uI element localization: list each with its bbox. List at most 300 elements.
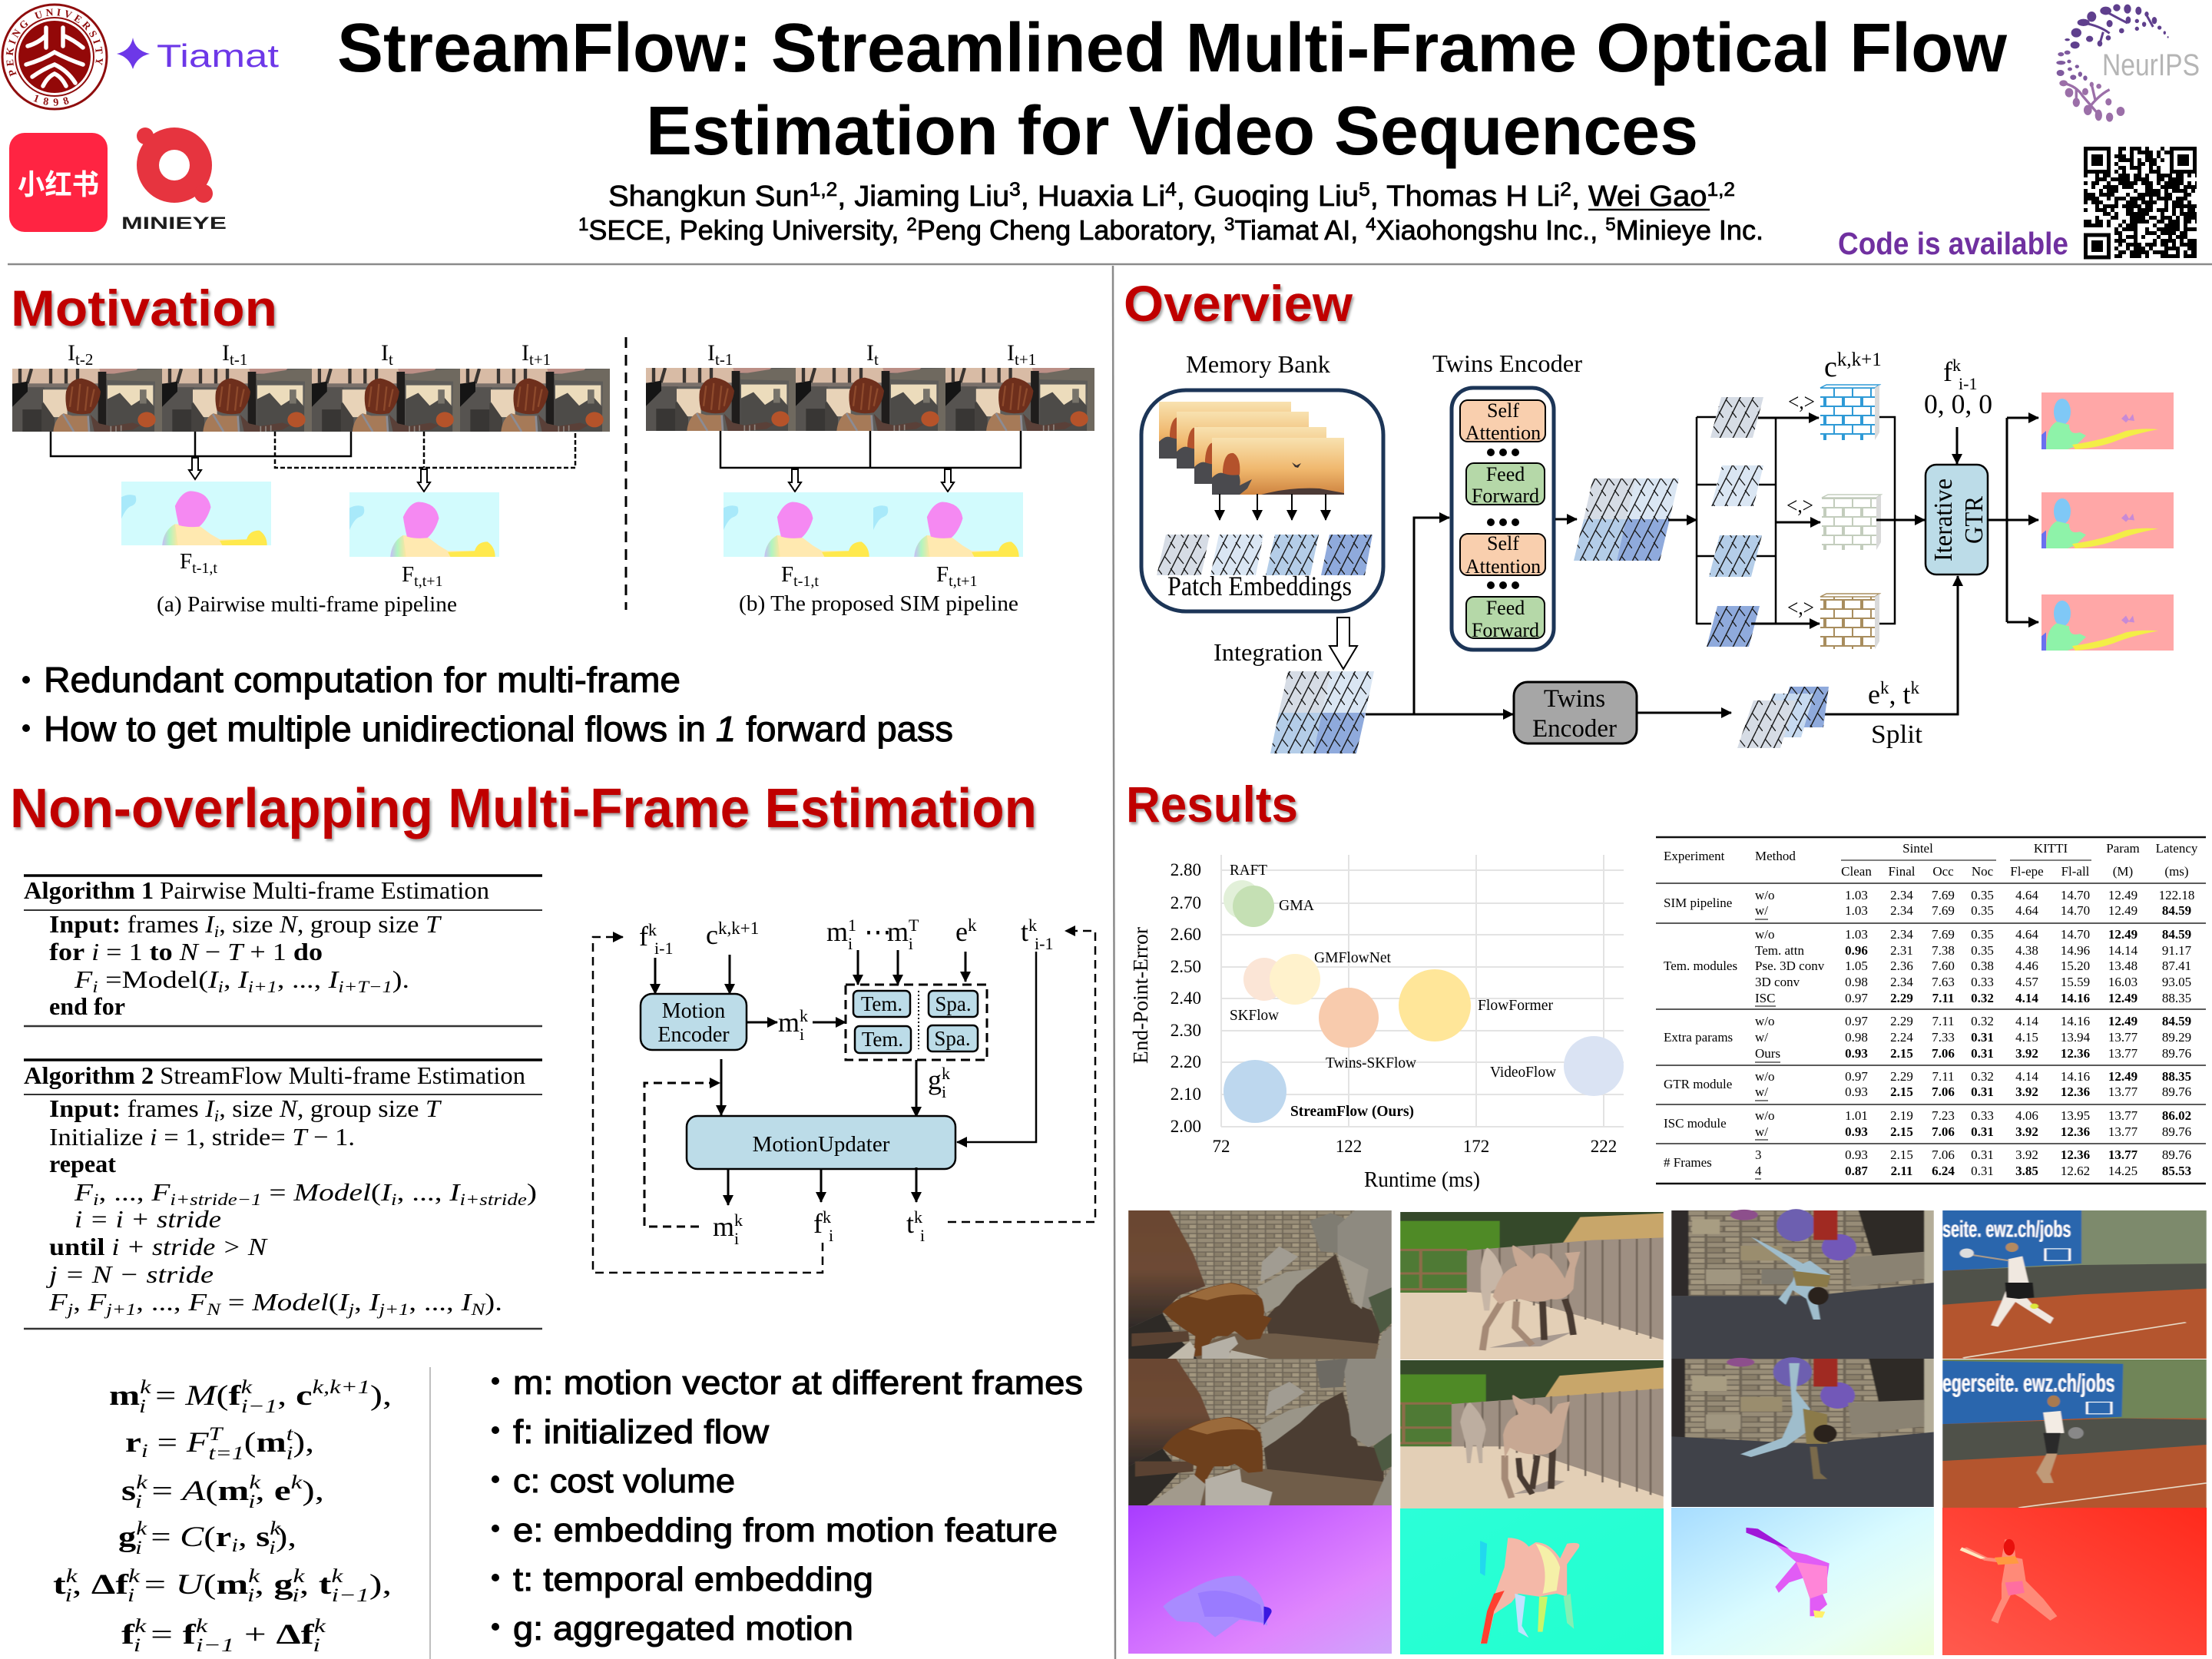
algorithm 2: [24, 1060, 542, 1329]
table header: Fl-all: [2061, 864, 2090, 879]
table values: 2.29: [1890, 1069, 1913, 1084]
diagram: motion updater architecture: [593, 916, 1095, 1273]
algorithm 2: i: [391, 1190, 397, 1209]
y axis ticks: 2.10: [1171, 1084, 1201, 1104]
y axis ticks: 2.80: [1171, 860, 1201, 879]
input labels: T: [909, 916, 919, 935]
equations: (: [244, 1427, 256, 1459]
inner product labels: <,>: [1788, 390, 1815, 413]
algorithm 2: i: [214, 1106, 219, 1125]
method names: w/: [1755, 1084, 1768, 1099]
equations: i: [269, 1538, 276, 1558]
table values: 12.36: [2061, 1046, 2090, 1061]
table values: 1.01: [1845, 1108, 1868, 1123]
arrow: [720, 1059, 722, 1115]
equations: i−1: [196, 1635, 234, 1656]
box: Iterative GTR: [1926, 465, 1988, 575]
QR code: [2084, 149, 2197, 257]
table header: Sintel: [1902, 841, 1933, 856]
symbol legend: t: temporal embedding: [513, 1561, 873, 1598]
equations: =: [148, 1427, 187, 1459]
arrow: [418, 469, 430, 492]
table values: 0.31: [1971, 1124, 1994, 1139]
bubble labels: FlowFormer: [1478, 997, 1553, 1014]
algorithm 2: Model (I: [252, 1288, 346, 1316]
frame labels: t-1: [715, 350, 733, 369]
equations: ,: [238, 1522, 256, 1553]
equations: k,k+1: [313, 1377, 370, 1398]
table values: 2.34: [1890, 975, 1913, 989]
label e,t: k: [1911, 678, 1920, 697]
table values: 16.03: [2108, 975, 2137, 989]
table values: 4.14: [2015, 991, 2038, 1005]
photo: camel flow: [1400, 1508, 1664, 1654]
frame labels: t+1: [529, 350, 551, 369]
output arrows: [728, 1167, 916, 1205]
equations: k: [293, 1566, 306, 1587]
flow labels: [781, 562, 978, 590]
table values: 7.69: [1932, 888, 1955, 902]
logo: Xiaohongshu: [9, 133, 108, 232]
table values: 7.69: [1932, 927, 1955, 942]
equations: k: [270, 1518, 281, 1539]
affiliations: Peng Cheng Laboratory,: [917, 214, 1224, 246]
algorithm 2: , ...,: [99, 1178, 151, 1206]
y axis ticks: 2.50: [1171, 957, 1201, 976]
table values: 12.36: [2061, 1147, 2090, 1162]
table values: 3.92: [2015, 1046, 2038, 1061]
frame labels: I: [1007, 340, 1015, 366]
twins encoder panel: Feed: [1486, 463, 1525, 485]
bubble labels: RAFT: [1230, 862, 1267, 879]
table values: 12.36: [2061, 1084, 2090, 1099]
table values: 3.92: [2015, 1124, 2038, 1139]
label: Memory Bank: Memory Bank: [1186, 350, 1330, 378]
input arrows: [655, 950, 965, 994]
frame labels: t: [874, 350, 879, 369]
table values: 0.31: [1971, 1046, 1994, 1061]
table values: 13.48: [2108, 959, 2137, 973]
connector: [1414, 518, 1449, 714]
equations: =: [142, 1522, 180, 1553]
algorithm 1: i: [92, 977, 98, 996]
frame labels: [707, 340, 1036, 369]
equations: i: [247, 1585, 254, 1606]
table values: 2.19: [1890, 1108, 1913, 1123]
table values: 4.14: [2015, 1069, 2038, 1084]
photo: dancer frame 2: [1671, 1357, 1934, 1507]
authors: , Jiaming Liu: [837, 180, 1009, 213]
equations: e: [274, 1475, 291, 1507]
output labels: m: [713, 1211, 734, 1242]
algorithm 2: i: [93, 1190, 99, 1209]
output arrows: [1988, 418, 2038, 622]
table values: 13.94: [2061, 1030, 2091, 1045]
label c: k,k+1: [1837, 349, 1882, 370]
table values: 7.60: [1932, 959, 1955, 973]
algorithm 1: i+T−1: [338, 977, 392, 996]
table values: 7.63: [1932, 975, 1955, 989]
twins encoder panel: Attention: [1465, 422, 1541, 444]
cost volume: blue: [1820, 385, 1879, 440]
equations: =: [141, 1619, 183, 1651]
table values: 0.98: [1845, 975, 1868, 989]
equations: c: [296, 1380, 313, 1412]
algorithm 2: F: [151, 1178, 171, 1206]
algorithm 1: ,: [224, 965, 238, 993]
algorithm 1: i: [214, 922, 219, 941]
table values: 14.14: [2108, 943, 2138, 958]
equations: T: [209, 1424, 224, 1445]
logo: Minieye: [121, 127, 227, 233]
code link note: Code is available: [1838, 226, 2068, 261]
diagram: StreamFlow overview: [1141, 349, 2174, 753]
table header: Latency: [2156, 841, 2198, 856]
flow labels: t-1,t: [192, 560, 217, 577]
table values: 89.76: [2162, 1124, 2191, 1139]
dashed feedback: m: [644, 1083, 720, 1227]
table values: 4.57: [2015, 975, 2038, 989]
flow map: [873, 492, 1023, 557]
table values: 13.77: [2108, 1147, 2138, 1162]
photo: tennis frame 1: [1942, 1210, 2207, 1359]
flow labels: F: [180, 549, 192, 574]
algorithm 2: i+stride−1: [170, 1190, 262, 1209]
input labels: 1: [848, 916, 856, 935]
table header: Occ: [1932, 864, 1954, 879]
inner product labels: <,>: [1787, 596, 1814, 619]
flow labels: t,t+1: [414, 573, 443, 590]
table values: 13.77: [2108, 1046, 2138, 1061]
table values: 2.15: [1890, 1124, 1913, 1139]
logo: Peking University seal: [2, 3, 108, 111]
input labels: e: [955, 916, 968, 947]
photo: dancer frame 1: [1671, 1209, 1934, 1359]
equations: ,: [277, 1380, 296, 1412]
table values: 0.96: [1845, 943, 1868, 958]
split buses: [1697, 417, 1776, 624]
label f: i-1: [1959, 374, 1977, 393]
frame strip: [12, 369, 610, 432]
algorithm 1: I: [327, 965, 339, 993]
algorithm 2: i+stride: [460, 1190, 527, 1209]
connector: [1366, 713, 1513, 716]
input labels: k: [1028, 916, 1037, 935]
merge bus: [1879, 417, 1895, 624]
method names: Ours: [1755, 1046, 1780, 1061]
equations: +: [234, 1619, 276, 1651]
table values: 14.96: [2061, 943, 2090, 958]
frame labels: t+1: [1015, 350, 1036, 369]
x axis ticks: 172: [1463, 1137, 1489, 1156]
authors: 4: [1165, 179, 1177, 200]
equations: i: [134, 1635, 141, 1656]
table values: 1.03: [1845, 927, 1868, 942]
arrow: [916, 1060, 917, 1117]
table values: 13.95: [2061, 1108, 2090, 1123]
algorithm 2: N: [470, 1300, 486, 1319]
authors: , Guoqing Liu: [1177, 180, 1359, 213]
flow output 1: [2041, 392, 2174, 449]
algorithm 2: ).: [485, 1288, 502, 1316]
table values: 14.16: [2061, 1069, 2090, 1084]
dashed group: temporal and spatial: Tem.: [862, 1028, 903, 1051]
equations: s: [256, 1522, 270, 1553]
experiment names: SIM pipeline: [1664, 896, 1732, 910]
algorithm 2: , ...,: [136, 1288, 188, 1316]
table values: 0.33: [1971, 975, 1994, 989]
equations: g: [273, 1569, 293, 1601]
algorithm 1: F: [74, 965, 93, 993]
table values: 0.97: [1845, 991, 1868, 1005]
table values: 0.31: [1971, 1030, 1994, 1045]
connectors: [720, 431, 1021, 468]
affiliations: 4: [1366, 214, 1376, 235]
table values: 89.76: [2162, 1147, 2191, 1162]
table values: 14.16: [2061, 1014, 2090, 1028]
bubble labels: StreamFlow (Ours): [1290, 1103, 1414, 1120]
input labels: t: [1021, 916, 1028, 947]
equations: Δf: [91, 1569, 129, 1601]
equations: k: [241, 1377, 253, 1398]
equations: k: [249, 1472, 261, 1493]
logo: Tiamat: Tiamat: [157, 38, 279, 74]
twins encoder panel: Self: [1487, 532, 1519, 555]
y axis ticks: 2.70: [1171, 893, 1201, 912]
algorithm 2: =: [220, 1288, 252, 1316]
photo: bear frame 2: [1128, 1359, 1392, 1505]
table values: 2.34: [1890, 927, 1913, 942]
method names: w/: [1755, 1124, 1768, 1139]
algorithm 1: ).: [392, 965, 409, 993]
solid connectors: [51, 432, 351, 456]
equations: f: [121, 1619, 135, 1651]
y axis ticks: [1171, 860, 1201, 1136]
flow labels: F: [781, 562, 793, 587]
algorithm 1: , size: [219, 910, 280, 938]
equations: t=1: [209, 1443, 244, 1464]
symbol legend: e: embedding from motion feature: [513, 1512, 1058, 1549]
equations: i: [248, 1492, 255, 1512]
symbol legend: g: aggregated motion: [513, 1610, 853, 1647]
algorithm 2: , size: [219, 1094, 280, 1122]
algorithm 2: Input: frames I: [49, 1094, 214, 1122]
equations: i: [141, 1441, 148, 1462]
method names: 3: [1755, 1147, 1762, 1162]
table values: 0.32: [1971, 1014, 1994, 1028]
algorithm 2: , ...,: [409, 1288, 462, 1316]
method names: w/o: [1755, 888, 1774, 902]
photo: bear frame 1: [1128, 1210, 1392, 1359]
authors: , Huaxia Li: [1021, 180, 1165, 213]
algorithm 1: Algorithm 1 Pairwise Multi-frame Estimation: [24, 876, 489, 904]
photo: camel frame 2: [1400, 1360, 1664, 1508]
algorithm 2: N, group size T: [280, 1094, 439, 1122]
box: Motion Encoder: Motion: [662, 999, 725, 1023]
correlation arrows: [1751, 418, 1820, 624]
method names: w/o: [1755, 927, 1774, 942]
algorithm 1: [24, 876, 542, 1026]
table values: 0.98: [1845, 1030, 1868, 1045]
box: Twins Encoder: Encoder: [1532, 715, 1617, 743]
table header: Noc: [1972, 864, 1994, 879]
output labels: k: [823, 1207, 831, 1227]
logo: Xiaohongshu: 小红书: [18, 169, 99, 200]
equations: i: [139, 1396, 146, 1417]
algorithm 1: I: [237, 965, 249, 993]
table values: 13.77: [2108, 1030, 2138, 1045]
equations: t: [53, 1569, 67, 1601]
equations: ,: [254, 1569, 273, 1601]
heading: Results: Results: [1126, 776, 1298, 833]
bubble labels: VideoFlow: [1490, 1064, 1557, 1081]
table values: 88.35: [2162, 991, 2191, 1005]
authors: Shangkun Sun: [608, 180, 800, 213]
authors: 2: [1560, 179, 1571, 200]
table values: 3.92: [2015, 1147, 2038, 1162]
table values: 0.97: [1845, 1069, 1868, 1084]
arrow: [813, 1022, 846, 1023]
algorithm 1: end for: [49, 992, 125, 1020]
box: MotionUpdater: MotionUpdater: [753, 1132, 890, 1157]
equations: m: [109, 1380, 140, 1412]
table values: 0.97: [1845, 1014, 1868, 1028]
table values: 2.29: [1890, 991, 1913, 1005]
equations: i: [231, 1535, 238, 1556]
equations: ),: [369, 1569, 392, 1601]
dashed connectors: [275, 432, 575, 468]
y axis ticks: 2.40: [1171, 988, 1201, 1008]
equations: =: [134, 1569, 176, 1601]
table values: 12.49: [2108, 991, 2137, 1005]
table header: Method: [1755, 849, 1796, 863]
box: Motion Encoder: [641, 994, 747, 1050]
output labels: i: [734, 1229, 739, 1248]
flow labels: [180, 549, 443, 590]
photo: tennis frame 2: [1942, 1359, 2207, 1508]
algorithm 2: j: [346, 1300, 354, 1319]
table values: 0.31: [1971, 1164, 1994, 1178]
algorithm 2: F: [87, 1288, 107, 1316]
results table: [1656, 837, 2206, 1184]
authors: , Wei Gao: [1571, 180, 1707, 213]
cost volume: green-gray: [1822, 495, 1881, 550]
algorithm 2: F: [187, 1288, 207, 1316]
table values: 12.49: [2108, 888, 2137, 902]
table values: 87.41: [2162, 959, 2191, 973]
logo: NeurIPS: [2056, 4, 2200, 122]
table values: 14.70: [2061, 888, 2090, 902]
photo: bear flow: [1128, 1505, 1392, 1654]
output labels: [713, 1207, 925, 1248]
photo: camel frame 1: [1400, 1212, 1664, 1359]
table values: 15.59: [2061, 975, 2090, 989]
equations: f: [183, 1619, 197, 1651]
algorithm 1: i: [218, 977, 224, 996]
symbol legend: f: initialized flow: [513, 1413, 769, 1451]
table values: [1845, 888, 2194, 1178]
algorithm 2: ): [527, 1178, 537, 1206]
frame labels: I: [707, 340, 715, 366]
affiliations: 1: [578, 214, 588, 235]
dashed group: temporal and spatial: Tem.: [861, 992, 902, 1015]
dashed group: temporal and spatial: Spa.: [934, 1027, 971, 1050]
equations: C(r: [180, 1522, 228, 1553]
input labels: k: [968, 916, 977, 935]
table values: 14.70: [2061, 927, 2090, 942]
bubble labels: GMA: [1279, 897, 1315, 914]
table values: 13.77: [2108, 1084, 2138, 1099]
table values: 0.87: [1845, 1164, 1868, 1178]
box: Twins Encoder: Twins: [1544, 685, 1605, 713]
arrow: [189, 458, 201, 479]
arrow: [747, 1022, 777, 1023]
table values: 7.11: [1932, 1069, 1955, 1084]
output labels: f: [813, 1208, 823, 1239]
box: Motion Encoder: Encoder: [657, 1023, 730, 1047]
table values: 0.93: [1845, 1124, 1868, 1139]
input labels: k,k+1: [718, 919, 759, 938]
input labels: k: [648, 920, 657, 939]
method names: Pse. 3D conv: [1755, 959, 1825, 973]
dashed feedback: f: [593, 937, 823, 1273]
table values: 7.06: [1932, 1046, 1955, 1061]
algorithm 2: until i + stride > N: [49, 1233, 268, 1260]
x axis title: Runtime (ms): [1364, 1168, 1480, 1192]
bubble labels: SKFlow: [1230, 1007, 1280, 1024]
table rules: [1656, 837, 2206, 1184]
output labels: t: [906, 1208, 914, 1239]
algorithm 2: , ...,: [397, 1178, 449, 1206]
equations: ,: [255, 1475, 274, 1507]
experiment names: ISC module: [1664, 1116, 1727, 1131]
table values: 89.76: [2162, 1046, 2191, 1061]
symbol legend: c: cost volume: [513, 1462, 735, 1500]
input labels: f: [639, 921, 648, 952]
table values: 0.33: [1971, 1108, 1994, 1123]
arrow: [1876, 519, 1925, 521]
flow labels: t-1,t: [793, 573, 819, 590]
table values: 91.17: [2162, 943, 2192, 958]
table values: 12.62: [2061, 1164, 2090, 1178]
equations: i: [292, 1585, 300, 1606]
equations: t: [319, 1569, 332, 1601]
y axis ticks: 2.60: [1171, 925, 1201, 944]
bubble labels: [1230, 862, 1557, 1120]
integrated patch: [1270, 671, 1374, 753]
experiment names: Extra params: [1664, 1030, 1733, 1045]
heading: Motivation: Motivation: [11, 280, 277, 336]
equations: k: [248, 1566, 260, 1587]
equations: k: [314, 1616, 326, 1637]
authors: 1,2: [810, 179, 837, 200]
caption b: (b) The proposed SIM pipeline: [739, 592, 1018, 616]
equations: i: [135, 1492, 142, 1512]
algorithm 2: N: [206, 1300, 222, 1319]
experiment names: Tem. modules: [1664, 959, 1737, 973]
table header: KITTI: [2034, 841, 2068, 856]
table values: 1.05: [1845, 959, 1868, 973]
affiliations: Tiamat AI,: [1234, 214, 1366, 246]
table values: 0.35: [1971, 943, 1994, 958]
table values: 3.92: [2015, 1084, 2038, 1099]
twins encoder panel: Forward: [1472, 485, 1539, 507]
table values: 0.93: [1845, 1084, 1868, 1099]
table values: 4.46: [2015, 959, 2038, 973]
author underline: [1588, 209, 1710, 210]
table values: 7.06: [1932, 1147, 1955, 1162]
twins encoder panel: Feed: [1486, 597, 1525, 619]
